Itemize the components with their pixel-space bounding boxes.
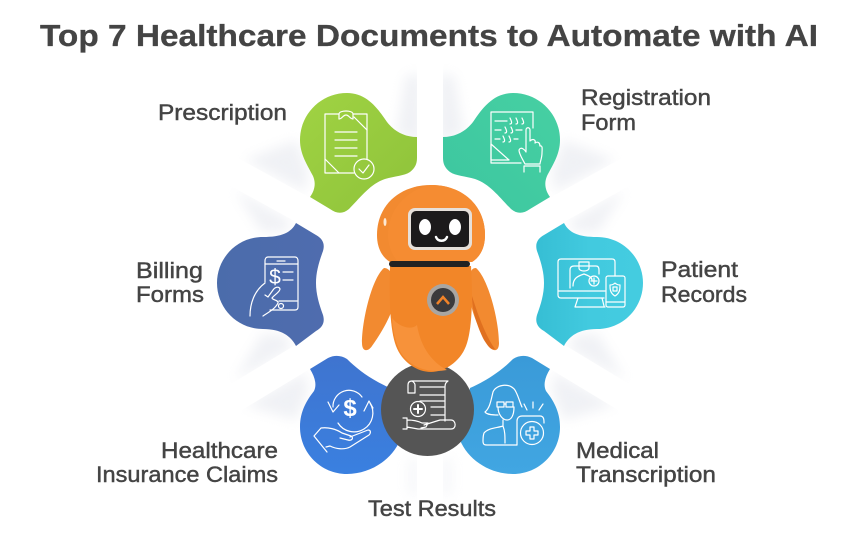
label: registration form: Registration: [581, 85, 711, 110]
panel: healthcare insurance claims blob: [300, 356, 400, 474]
panel: test results circle: [381, 363, 474, 456]
icon: doctor with medical badge: [483, 385, 544, 445]
label: healthcare insurance claims: Healthcare: [161, 438, 278, 463]
panel: prescription blob: [300, 93, 417, 213]
chest badge: [427, 284, 459, 316]
label: test results: Test Results: [368, 496, 496, 521]
label: prescription: Prescription: [158, 100, 287, 125]
icon: prescription document: [325, 111, 374, 179]
label: patient records: Patient: [661, 257, 738, 282]
title: Top 7 Healthcare Documents to Automate with AI: [40, 18, 818, 53]
label: registration form: Form: [581, 110, 636, 135]
eyes and smile: [419, 219, 431, 235]
label: medical transcription: Transcription: [576, 462, 716, 487]
robot mascot: [362, 185, 499, 372]
icon: scroll with medical cross on hand: [403, 381, 455, 429]
spoke shadows: [200, 50, 660, 510]
screen: [408, 208, 472, 250]
white gaps: [200, 50, 660, 510]
collar: [389, 261, 470, 267]
panel: medical transcription blob: [460, 356, 560, 474]
body: [390, 266, 472, 372]
panel: patient records blob: [536, 223, 643, 346]
icon: registration form with hand: [491, 112, 542, 172]
dollar glyph: $: [343, 395, 357, 422]
icon: monitor doctor and phone: [558, 259, 625, 307]
panel: billing forms blob: [217, 223, 324, 346]
head: [377, 185, 485, 262]
icon: phone with dollar: [250, 257, 298, 316]
right arm: [470, 268, 499, 350]
label: patient records: Records: [661, 282, 747, 307]
left arm: [362, 268, 395, 350]
icon: dollar in hand: [314, 390, 373, 452]
label: billing forms: Forms: [136, 282, 204, 307]
dollar glyph: $: [269, 266, 281, 289]
label: billing forms: Billing: [136, 258, 203, 283]
panel: registration form blob: [443, 93, 560, 213]
label: healthcare insurance claims: Insurance Claims: [96, 462, 278, 487]
label: medical transcription: Medical: [576, 438, 659, 463]
